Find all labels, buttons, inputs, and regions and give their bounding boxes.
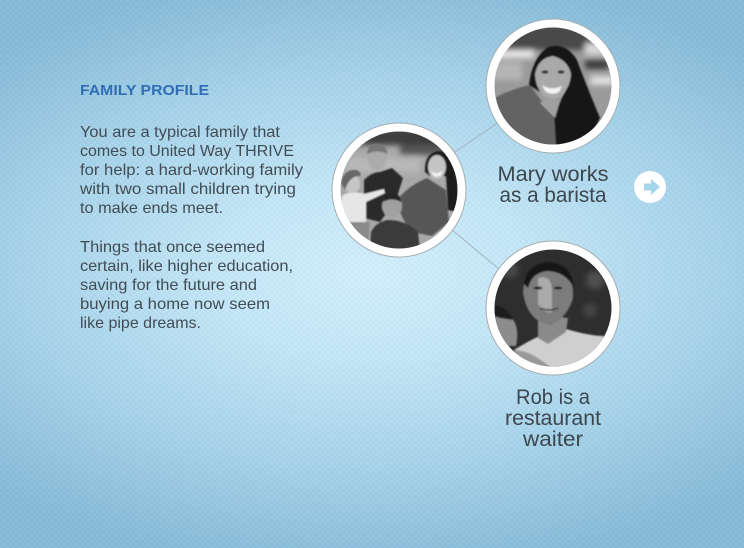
text block: intro paragraph: comes to United Way THRIVE xyxy=(80,143,294,160)
child at left xyxy=(495,315,518,347)
icon: next arrow button xyxy=(634,171,666,203)
photo: Rob xyxy=(486,241,620,375)
man xyxy=(364,168,403,222)
text block: intro paragraph: for help: a hard-working family xyxy=(80,162,303,179)
photo: Mary xyxy=(486,19,620,153)
text block: intro paragraph: with two small children trying xyxy=(79,181,296,198)
text block: second paragraph: buying a home now seem xyxy=(80,296,270,313)
caption: Rob xyxy=(505,386,601,451)
woman xyxy=(397,178,449,236)
caption: Mary: as a barista xyxy=(500,184,607,207)
text block: second paragraph: Things that once seemed xyxy=(80,239,265,256)
shirt xyxy=(514,329,604,367)
neck xyxy=(538,315,568,344)
caption: Rob: waiter xyxy=(522,428,583,451)
girl xyxy=(341,189,385,222)
text block: second paragraph: certain, like higher education, xyxy=(80,258,293,275)
caption: Rob: Rob is a xyxy=(516,386,590,409)
boy xyxy=(370,220,420,250)
photo: family portrait xyxy=(332,123,466,257)
connector: family to Rob xyxy=(452,230,499,269)
sweater xyxy=(494,85,558,146)
caption: Mary xyxy=(498,163,608,207)
face xyxy=(523,264,573,325)
connector: family to Mary xyxy=(455,122,499,152)
text block: second paragraph: like pipe dreams. xyxy=(80,315,201,332)
text block: second paragraph xyxy=(80,239,293,332)
text block: second paragraph: saving for the future and xyxy=(80,277,257,294)
caption: Rob: restaurant xyxy=(505,407,601,430)
heading: family profile: FAMILY PROFILE xyxy=(80,82,209,99)
text block: intro paragraph: You are a typical family that xyxy=(80,124,281,141)
caption: Mary: Mary works xyxy=(498,163,608,186)
text block: intro paragraph xyxy=(79,124,303,217)
hair xyxy=(529,46,600,146)
face xyxy=(535,56,571,99)
text block: intro paragraph: to make ends meet. xyxy=(80,200,223,217)
